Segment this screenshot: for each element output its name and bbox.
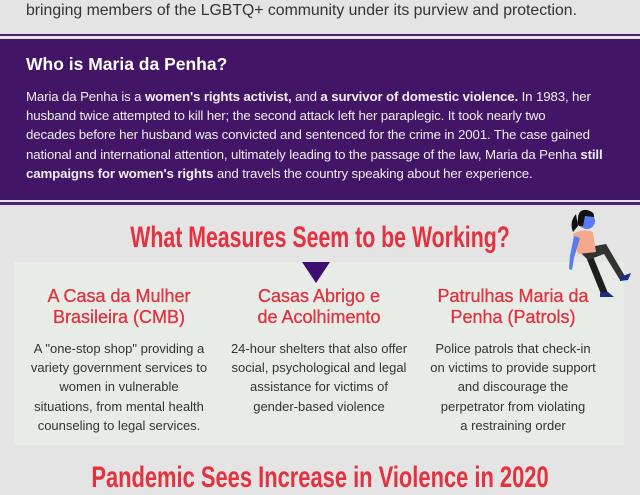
column: patrols: Patrulhas Maria da xyxy=(437,286,589,306)
column: patrols: on victims to provide support xyxy=(430,360,596,375)
heading: pandemic sees increase in violence: Pandemic Sees Increase in Violence in 2020 xyxy=(91,461,549,494)
heading: what measures seem to be working: What Measures Seem to be Working? xyxy=(130,221,510,254)
text block: biography: Maria da Penha is a women's rights activist, and a survivor of domestic violence. In 1983, her xyxy=(26,89,591,104)
column: patrols: Penha (Patrols) xyxy=(450,307,576,327)
column: patrols: perpetrator from violating xyxy=(441,399,585,414)
column: shelters: 24-hour shelters that also offer xyxy=(231,341,407,356)
text block: biography: national and international attention, ultimately leading to the passage of the law, Maria da Penha still xyxy=(26,147,603,162)
column: shelters xyxy=(231,286,407,414)
column: shelters: gender-based violence xyxy=(253,399,385,414)
column: CMB: women in vulnerable xyxy=(59,379,179,394)
top text block: bringing members of the LGBTQ+ community under its purview and protection. xyxy=(26,2,577,19)
column: CMB: A "one-stop shop" providing a xyxy=(34,341,204,356)
column: CMB: counseling to legal services. xyxy=(38,418,200,433)
icon: triangle pointer xyxy=(302,262,330,283)
column: patrols xyxy=(430,286,596,433)
column: shelters: Casas Abrigo e xyxy=(258,286,380,306)
text block: biography: campaigns for women's rights and travels the country speaking about her experience. xyxy=(26,166,533,181)
text block: biography: decades before her husband was convicted and sentenced for the crime in 2001. The case gained xyxy=(26,127,590,142)
column: CMB: A Casa da Mulher xyxy=(47,286,191,306)
column: CMB: variety government services to xyxy=(31,360,207,375)
text block: biography xyxy=(26,89,603,181)
column: CMB: Brasileira (CMB) xyxy=(53,307,185,327)
icon: sitting woman illustration xyxy=(569,210,631,297)
column: patrols: Police patrols that check-in xyxy=(435,341,591,356)
column: shelters: de Acolhimento xyxy=(257,307,381,327)
column: shelters: assistance for victims of xyxy=(250,379,388,394)
column: patrols: a restraining order xyxy=(460,418,566,433)
heading: who is Maria da Penha: Who is Maria da Penha? xyxy=(26,54,227,74)
column: patrols: and discourage the xyxy=(458,379,568,394)
panel: who is Maria da Penha xyxy=(0,39,640,200)
text block: biography: husband twice attempted to kill her; the second attack left her paraplegic. It took nearly two xyxy=(26,108,546,123)
panel: measures xyxy=(14,262,624,445)
column: CMB: situations, from mental health xyxy=(34,399,204,414)
column: CMB xyxy=(31,286,207,433)
column: shelters: social, psychological and legal xyxy=(232,360,406,375)
